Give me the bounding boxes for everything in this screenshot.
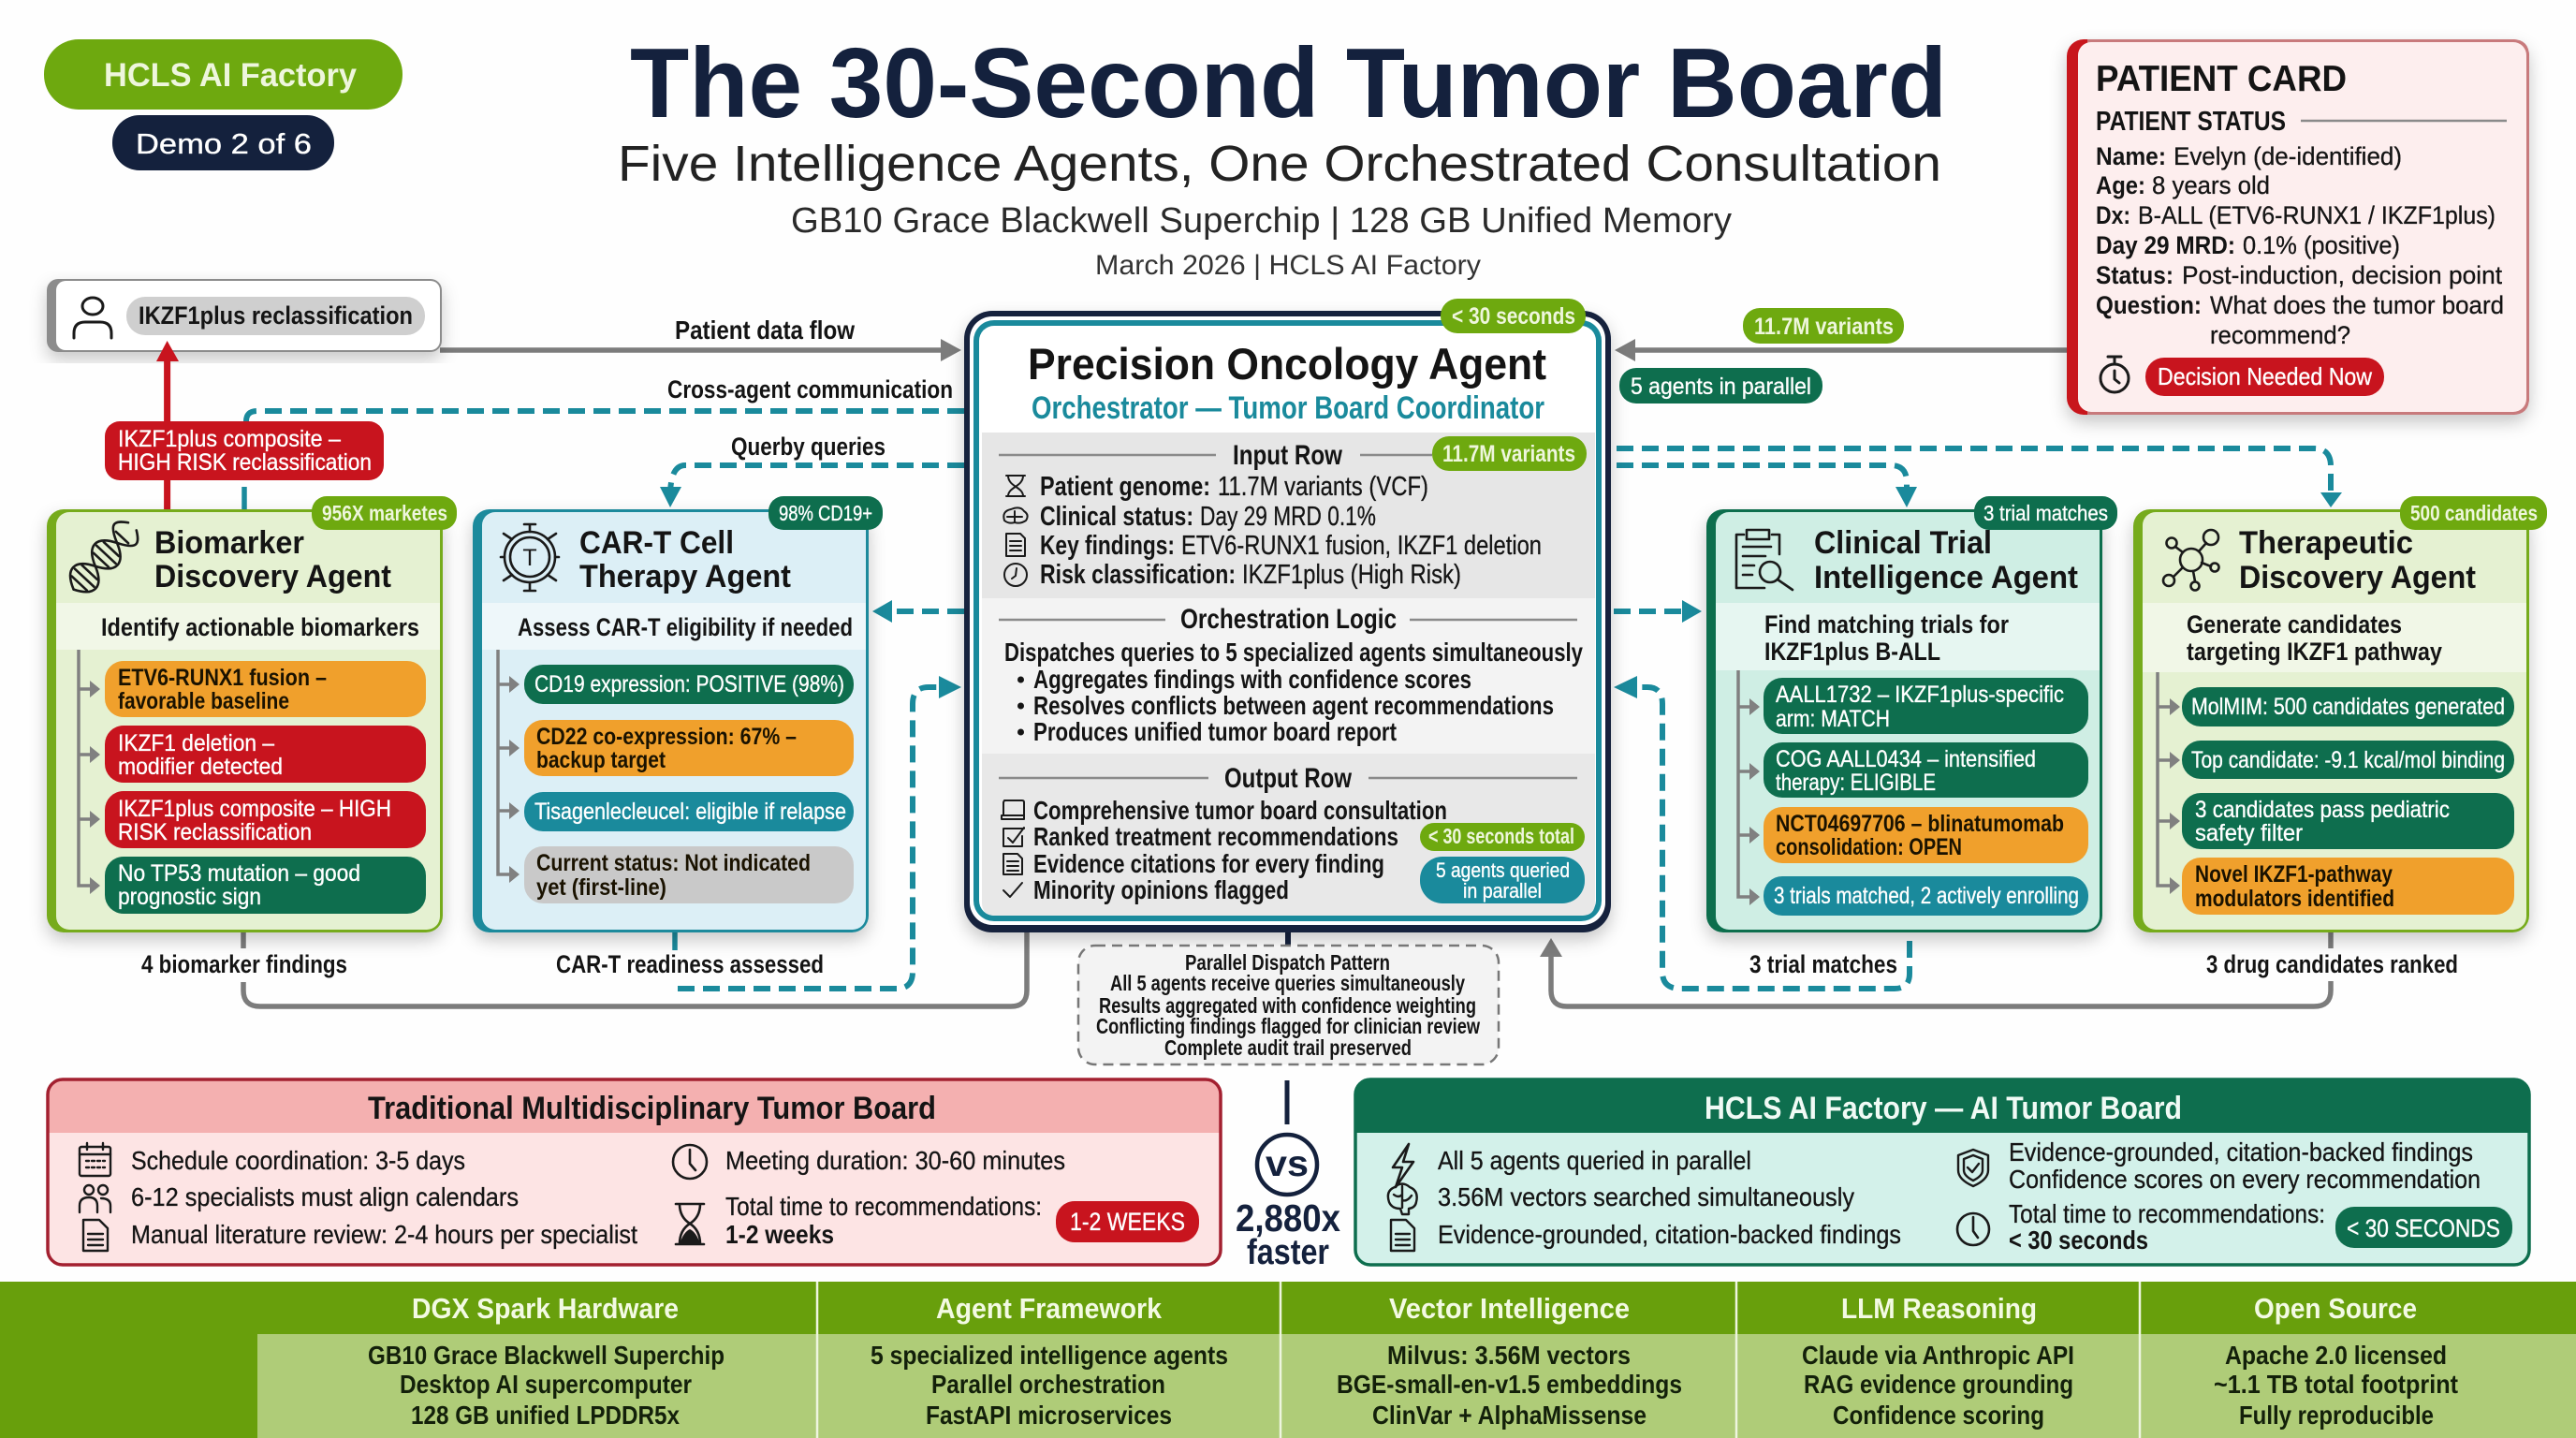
column: DGX Spark hardware: Desktop AI supercomputer (400, 1370, 692, 1399)
section: input row (982, 433, 1595, 598)
label: 4 biomarker findings: 4 biomarker findings (141, 950, 347, 978)
section: input row: Patient genome: (1040, 472, 1210, 502)
panel: HCLS AI tumor board: Evidence-grounded, citation-backed findings (2009, 1137, 2473, 1167)
subtitle: Five Intelligence Agents, One Orchestrated Consultation (618, 136, 1941, 192)
arrow: dashed to clinical trial agent (1617, 465, 1917, 507)
badge: Demo 2 of 6 (112, 115, 334, 170)
finding: COG AALL0434: COG AALL0434 – intensified (1776, 746, 2036, 772)
section: output row (982, 754, 1595, 916)
finding: Tisagenlecleucel (524, 792, 854, 831)
badge: markets: 956X marketes (322, 501, 447, 525)
finding: novel modulators: modulators identified (2195, 886, 2394, 912)
finding: COG AALL0434 (1764, 742, 2088, 798)
icon: DNA helix (63, 516, 143, 600)
icon: laptop (1002, 800, 1024, 819)
finding: CD22: CD22 co-expression: 67% – (536, 724, 797, 750)
finding: novel modulators: Novel IKZF1-pathway (2195, 861, 2393, 888)
panel: HCLS AI tumor board: All 5 agents queried in parallel (1438, 1146, 1751, 1175)
heading: Therapeutic (2239, 525, 2413, 561)
icon: people (80, 1185, 110, 1212)
section: input row: Day 29 MRD 0.1% (1200, 502, 1376, 532)
column: open source (2214, 1292, 2458, 1430)
finding: NCT04697706: NCT04697706 – blinatumomab (1776, 811, 2064, 837)
icon: document (1003, 854, 1022, 874)
finding: no TP53: No TP53 mutation – good (118, 860, 360, 887)
icon: stopwatch (2100, 357, 2129, 392)
badge: HCLS AI Factory: HCLS AI Factory (104, 57, 358, 94)
badge: 11.7M variants flow: 11.7M variants (1754, 314, 1894, 340)
tree connector (79, 650, 100, 894)
icon: T cell (501, 524, 559, 591)
column: DGX Spark hardware: 128 GB unified LPDDR5x (411, 1401, 680, 1430)
badge: decision needed now: Decision Needed Now (2158, 362, 2372, 390)
column: LLM reasoning: LLM Reasoning (1841, 1292, 2037, 1325)
tree connector (1738, 670, 1760, 905)
finding: pediatric safety (2182, 793, 2514, 849)
column: agent framework: 5 specialized intelligence agents (871, 1341, 1228, 1370)
panel: traditional tumor board: Meeting duration: 30-60 minutes (725, 1146, 1065, 1175)
section: orchestration logic: Aggregates findings with confidence scores (1033, 665, 1471, 694)
heading: PATIENT CARD (2096, 59, 2347, 99)
patient details: Evelyn (de-identified) (2174, 142, 2402, 170)
finding: AALL1732: arm: MATCH (1776, 706, 1890, 732)
panel: traditional tumor board: 1-2 weeks (725, 1220, 834, 1249)
badge: 5 agents queried: 5 agents queried (1436, 858, 1570, 882)
icon: document (83, 1220, 108, 1251)
badge: CD19 (768, 496, 883, 530)
label: CAR-T readiness assessed: CAR-T readiness assessed (556, 950, 824, 978)
icon: T cell: T (522, 545, 537, 571)
heading: Precision Oncology Agent (1028, 339, 1546, 389)
heading: Discovery Agent (154, 559, 391, 594)
panel: therapeutic discovery agent (2133, 496, 2547, 932)
arrow: patient data flow to center (440, 339, 961, 361)
arrow: CAR-T return dashed to center (675, 676, 961, 989)
column: DGX Spark hardware (368, 1292, 724, 1430)
box: IKZF1plus reclassification (47, 279, 442, 352)
icon: document (1391, 1220, 1414, 1251)
column: LLM reasoning: RAG evidence grounding (1804, 1370, 2073, 1399)
section: orchestration logic: Resolves conflicts between agent recommendations (1033, 691, 1554, 720)
callout: high risk reclassification (105, 421, 384, 480)
goal: targeting IKZF1 pathway (2187, 638, 2442, 666)
badge: 5 agents queried: in parallel (1463, 879, 1542, 902)
heading: Clinical Trial (1814, 525, 1992, 561)
label: cross-agent communication: Cross-agent communication (667, 375, 953, 404)
heading: CAR-T Cell (579, 525, 734, 561)
badge: under 30 seconds (2335, 1207, 2512, 1248)
badge: 11.7M variants: 11.7M variants (1442, 441, 1575, 467)
badge: HCLS AI Factory (44, 39, 402, 110)
panel: biomarker discovery agent (47, 496, 457, 932)
column: agent framework (871, 1292, 1228, 1430)
callout: high risk reclassification: IKZF1plus composite – (118, 426, 341, 452)
finding: ETV6-RUNX1 (105, 661, 426, 717)
badge: candidates: 500 candidates (2410, 501, 2538, 525)
patient details: Status: (2096, 261, 2174, 289)
patient details: Post-induction, decision point (2182, 261, 2502, 289)
goal: Generate candidates (2187, 610, 2402, 638)
column: agent framework: Parallel orchestration (931, 1370, 1165, 1399)
label: querby queries: Querby queries (731, 433, 886, 461)
icon: check (1003, 883, 1022, 897)
column: open source: ~1.1 TB total footprint (2214, 1370, 2458, 1399)
section: output row: Evidence citations for every finding (1033, 849, 1384, 878)
column: open source: Apache 2.0 licensed (2225, 1341, 2447, 1370)
badge: 5 agents in parallel (1619, 368, 1822, 404)
finding: IKZF1 deletion: modifier detected (118, 754, 283, 780)
section: input row: IKZF1plus (High Risk) (1242, 560, 1461, 590)
badge: 11.7M variants (1432, 436, 1587, 471)
heading: HCLS AI Factory — AI Tumor Board (1705, 1091, 2182, 1126)
finding: pediatric safety: safety filter (2195, 820, 2303, 846)
badge: 11.7M variants flow (1743, 308, 1904, 344)
column: open source: Open Source (2254, 1292, 2417, 1325)
badge: under 30 seconds: < 30 SECONDS (2347, 1214, 2500, 1242)
icon: person (74, 298, 111, 338)
finding: current status (524, 846, 854, 903)
heading (2239, 525, 2476, 595)
finding: CD19: CD19 expression: POSITIVE (98%) (534, 671, 844, 697)
patient details: Dx: (2096, 201, 2130, 229)
hardware line: GB10 Grace Blackwell Superchip | 128 GB Unified Memory (791, 201, 1732, 241)
callout: parallel dispatch pattern: Conflicting findings flagged for clinician review (1096, 1014, 1480, 1038)
callout: high risk reclassification: HIGH RISK reclassification (118, 449, 372, 476)
arrow: patient card to center (1615, 339, 2069, 361)
callout: parallel dispatch pattern: Parallel Dispatch Pattern (1185, 950, 1390, 975)
column: LLM reasoning: Claude via Anthropic API (1802, 1341, 2074, 1370)
badge: trial matches (1974, 496, 2117, 530)
goal: Identify actionable biomarkers (101, 613, 419, 641)
patient details: What does the tumor board (2210, 291, 2504, 319)
finding: NCT04697706: consolidation: OPEN (1776, 834, 1962, 860)
patient details: Age: (2096, 171, 2145, 199)
badge: markets (312, 496, 457, 530)
patient details: B-ALL (ETV6-RUNX1 / IKZF1plus) (2138, 201, 2496, 229)
section: orchestration logic: Dispatches queries to 5 specialized agents simultaneously (1004, 638, 1583, 667)
arrow: dashed to clinical trial from center (1614, 600, 1702, 623)
panel: traditional tumor board (48, 1079, 1221, 1265)
panel: HCLS AI tumor board: Evidence-grounded, citation-backed findings (1438, 1220, 1901, 1249)
section: orchestration logic: Produces unified tumor board report (1033, 717, 1397, 746)
arrow: CAR-T dashed from center (872, 600, 964, 623)
badge: Demo 2 of 6: Demo 2 of 6 (136, 127, 312, 160)
badge: candidates (2400, 496, 2547, 530)
section: input row: Clinical status: (1040, 502, 1193, 532)
arrow: cross-agent communication dashed (244, 411, 964, 510)
icon: clock (1957, 1213, 1989, 1245)
section: orchestration logic (982, 598, 1595, 754)
section: output row: Ranked treatment recommendations (1033, 822, 1398, 851)
arrow: query dashed to CAR-T (660, 465, 964, 507)
section: output row: Minority opinions flagged (1033, 875, 1289, 904)
arrow: clinical trial return dashed to center (1614, 676, 1910, 989)
badge: under 30 seconds total: < 30 seconds total (1428, 824, 1574, 848)
arrow: therapeutic return line (1540, 931, 2331, 1006)
column: vector intelligence: Vector Intelligence (1389, 1292, 1630, 1325)
callout: parallel dispatch pattern: Complete audit trail preserved (1164, 1035, 1412, 1060)
comparison: vs divider: faster (1247, 1233, 1329, 1272)
icon: genome (1006, 476, 1025, 496)
icon: brain (1388, 1183, 1417, 1214)
callout: parallel dispatch pattern: All 5 agents receive queries simultaneously (1110, 971, 1465, 995)
finding: CD22: backup target (536, 747, 666, 773)
icon: lightning (1393, 1144, 1413, 1187)
icon: brain (1003, 507, 1028, 523)
icon: calendar (80, 1143, 110, 1176)
section: input row: Risk classification: (1040, 560, 1236, 590)
arrow: biomarker return line (243, 931, 1027, 1006)
title: The 30-Second Tumor Board (630, 28, 1947, 139)
column: DGX Spark hardware: GB10 Grace Blackwell Superchip (368, 1341, 724, 1370)
heading: Intelligence Agent (1814, 560, 2078, 595)
finding: ETV6-RUNX1: ETV6-RUNX1 fusion – (118, 665, 327, 691)
badge: 1-2 weeks (1056, 1201, 1199, 1242)
finding: MolMIM: MolMIM: 500 candidates generated (2191, 694, 2505, 720)
finding: MolMIM (2182, 687, 2514, 726)
badge: 5 agents queried (1420, 857, 1585, 903)
heading: Traditional Multidisciplinary Tumor Board (368, 1091, 936, 1126)
finding: COG AALL0434: therapy: ELIGIBLE (1776, 770, 1936, 796)
finding: novel modulators (2182, 858, 2514, 915)
label: 3 drug candidates ranked: 3 drug candidates ranked (2206, 950, 2458, 978)
panel: clinical trial intelligence agent (1706, 496, 2117, 932)
badge: decision needed now (2145, 358, 2384, 396)
column: agent framework: FastAPI microservices (926, 1401, 1172, 1430)
panel: traditional tumor board: 6-12 specialists must align calendars (131, 1182, 519, 1211)
panel: HCLS AI tumor board: Confidence scores on every recommendation (2009, 1165, 2481, 1194)
panel: CAR-T cell therapy agent (473, 496, 883, 932)
finding: trials matched: 3 trials matched, 2 actively enrolling (1774, 883, 2079, 909)
heading: Therapy Agent (579, 559, 791, 594)
patient details: Day 29 MRD: (2096, 231, 2235, 259)
section: output row: Comprehensive tumor board consultation (1033, 796, 1447, 825)
goal: Find matching trials for (1764, 610, 2009, 638)
footer: technology stack (0, 1282, 2576, 1438)
section: input row: ETV6-RUNX1 fusion, IKZF1 deletion (1181, 531, 1542, 561)
finding: current status: yet (first-line) (536, 874, 666, 901)
badge: CD19: 98% CD19+ (779, 501, 872, 525)
finding: no TP53: prognostic sign (118, 884, 261, 910)
icon: document (1006, 534, 1025, 556)
panel: traditional tumor board: Schedule coordination: 3-5 days (131, 1146, 465, 1175)
tree connector (2158, 672, 2180, 894)
finding: top candidate (2182, 741, 2514, 779)
section: input row: Input Row (1233, 440, 1343, 471)
patient details: 8 years old (2152, 171, 2270, 199)
panel: patient card (2067, 39, 2529, 415)
goal: IKZF1plus B-ALL (1764, 638, 1940, 666)
badge: 5 agents in parallel: 5 agents in parallel (1631, 374, 1811, 400)
finding: ETV6-RUNX1: favorable baseline (118, 688, 289, 714)
icon: clipboard search (1736, 530, 1793, 590)
patient details (2096, 142, 2504, 349)
arrow: dashed to therapeutic agent (1617, 448, 2342, 507)
column: vector intelligence (1337, 1292, 1682, 1430)
badge: trial matches: 3 trial matches (1983, 501, 2108, 525)
goal (2187, 610, 2442, 666)
finding: top candidate: Top candidate: -9.1 kcal/mol binding (2191, 747, 2505, 773)
icon: molecule (2163, 530, 2218, 590)
column: open source: Fully reproducible (2239, 1401, 2434, 1430)
goal (1764, 610, 2009, 666)
finding: CD22 (524, 720, 854, 776)
section: orchestration logic: Orchestration Logic (1180, 604, 1397, 635)
column: vector intelligence: BGE-small-en-v1.5 embeddings (1337, 1370, 1682, 1399)
icon: shield (1958, 1150, 1988, 1186)
patient details: Name: (2096, 142, 2166, 170)
column: agent framework: Agent Framework (936, 1292, 1163, 1325)
arrow: red escalation (156, 341, 179, 510)
panel: HCLS AI tumor board: Total time to recommendations: (2009, 1199, 2325, 1228)
section: output row: Output Row (1224, 763, 1353, 794)
heading: Discovery Agent (2239, 560, 2476, 595)
column: LLM reasoning (1802, 1292, 2074, 1430)
section: input row: Key findings: (1040, 531, 1175, 561)
heading (154, 525, 391, 594)
icon: clock (673, 1145, 707, 1179)
comparison: vs divider (1236, 1080, 1340, 1272)
column: DGX Spark hardware: DGX Spark Hardware (412, 1292, 679, 1325)
finding: IKZF1 deletion: IKZF1 deletion – (118, 730, 274, 756)
panel: HCLS AI tumor board: < 30 seconds (2009, 1225, 2148, 1255)
column: vector intelligence: ClinVar + AlphaMissense (1372, 1401, 1647, 1430)
heading: Biomarker (154, 525, 304, 561)
heading (1814, 525, 2078, 595)
panel: precision oncology agent orchestrator (964, 299, 1611, 932)
panel: HCLS AI tumor board: 3.56M vectors searched simultaneously (1438, 1182, 1854, 1211)
icon: hourglass (676, 1204, 704, 1244)
callout: parallel dispatch pattern: Results aggregated with confidence weighting (1099, 993, 1476, 1018)
finding: trials matched (1764, 876, 2088, 916)
callout: parallel dispatch pattern (1078, 946, 1499, 1064)
patient details: 0.1% (positive) (2243, 231, 2400, 259)
comparison: vs divider: vs (1266, 1144, 1309, 1184)
panel: traditional tumor board: Total time to recommendations: (725, 1192, 1042, 1221)
badge: under 30 seconds: < 30 seconds (1452, 303, 1575, 330)
finding: IKZF1plus composite: RISK reclassification (118, 819, 312, 845)
arrow: center to dispatch box (1285, 931, 1291, 947)
section: input row: 11.7M variants (VCF) (1218, 472, 1428, 502)
patient details: recommend? (2210, 321, 2350, 349)
subheading: Orchestrator — Tumor Board Coordinator (1032, 390, 1544, 426)
badge: under 30 seconds (1441, 299, 1586, 333)
heading (579, 525, 791, 594)
finding: current status: Current status: Not indicated (536, 850, 811, 876)
finding: IKZF1plus composite: IKZF1plus composite – HIGH (118, 796, 391, 822)
finding: no TP53 (105, 857, 426, 914)
date line: March 2026 | HCLS AI Factory (1095, 250, 1481, 281)
finding: AALL1732: AALL1732 – IKZF1plus-specific (1776, 682, 2064, 708)
label: 3 trial matches: 3 trial matches (1749, 950, 1897, 978)
label: patient data flow: Patient data flow (675, 315, 855, 345)
badge: 1-2 weeks: 1-2 WEEKS (1070, 1208, 1185, 1236)
finding: IKZF1 deletion (105, 726, 426, 783)
finding: NCT04697706 (1764, 807, 2088, 863)
goal: Assess CAR-T eligibility if needed (518, 613, 853, 641)
column: LLM reasoning: Confidence scoring (1833, 1401, 2044, 1430)
column: vector intelligence: Milvus: 3.56M vectors (1387, 1341, 1631, 1370)
icon: clock (1004, 564, 1027, 586)
box: IKZF1plus reclassification: IKZF1plus reclassification (139, 301, 413, 330)
finding: Tisagenlecleucel: Tisagenlecleucel: eligible if relapse (534, 799, 846, 825)
patient details: Question: (2096, 291, 2202, 319)
finding: IKZF1plus composite (105, 791, 426, 848)
tree connector (498, 650, 520, 883)
panel: traditional tumor board: Manual literature review: 2-4 hours per specialist (131, 1220, 637, 1249)
icon: checklist (1003, 828, 1024, 846)
comparison: vs divider: 2,880x (1236, 1196, 1340, 1240)
finding: CD19 (524, 665, 854, 704)
finding: AALL1732 (1764, 678, 2088, 734)
panel: HCLS AI tumor board (1355, 1079, 2529, 1265)
finding: pediatric safety: 3 candidates pass pediatric (2195, 797, 2450, 823)
subheading: PATIENT STATUS (2096, 107, 2286, 137)
